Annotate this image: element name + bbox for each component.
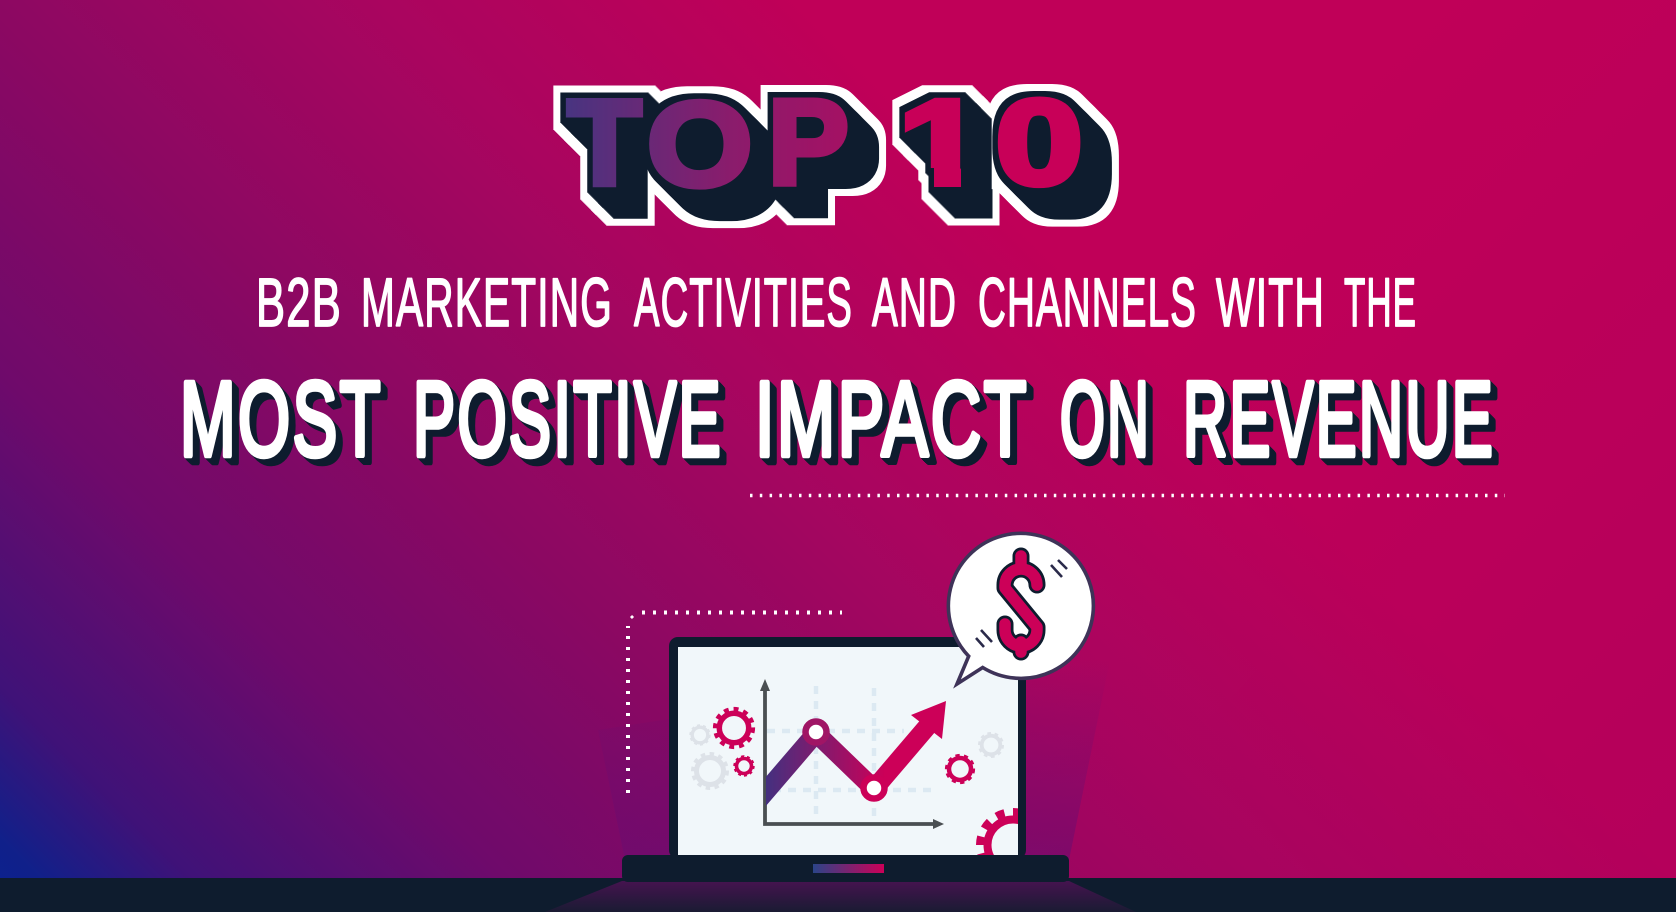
light beam behind laptop xyxy=(598,650,1112,860)
subtitle line 2 with extruded shadow: POSITIVE xyxy=(413,360,723,478)
floor reflection xyxy=(545,881,1136,912)
laptop colour bar xyxy=(813,864,884,873)
subtitle line 1 xyxy=(256,264,1417,341)
gear: grey large xyxy=(693,754,727,788)
subtitle line 1: THE xyxy=(1344,264,1417,341)
laptop base xyxy=(622,855,1069,882)
subtitle line 1: CHANNELS xyxy=(978,264,1197,341)
title: TOP 10 xyxy=(568,74,1083,212)
subtitle line 1: AND xyxy=(872,264,957,341)
gear: clipped corner red xyxy=(976,808,1018,855)
subtitle line 2 with extruded shadow xyxy=(180,360,1495,478)
subtitle line 1: ACTIVITIES xyxy=(634,264,853,341)
dotted divider line xyxy=(750,494,1505,497)
icon: dollar sign xyxy=(1005,556,1037,652)
laptop xyxy=(622,637,1069,882)
subtitle line 2 with extruded shadow: IMPACT xyxy=(755,360,1029,478)
gear: small red left xyxy=(735,757,753,775)
gear: grey right xyxy=(979,733,1003,757)
subtitle line 1: MARKETING xyxy=(361,264,613,341)
dark floor bar xyxy=(0,878,1676,912)
chart grid xyxy=(767,686,936,820)
dotted corner line xyxy=(628,612,842,793)
chart axes xyxy=(760,679,944,829)
rising trend line with arrow xyxy=(766,701,946,806)
gear: grey small xyxy=(690,725,710,745)
laptop lid xyxy=(669,637,1026,859)
title: TOP 10: T xyxy=(568,74,641,210)
subtitle line 2 with extruded shadow: ON xyxy=(1060,360,1151,478)
gear: large red xyxy=(715,709,753,747)
speech bubble with dollar sign xyxy=(948,533,1093,684)
chart point markers xyxy=(806,722,884,798)
title: TOP 10: P xyxy=(768,74,849,210)
subtitle line 1: WITH xyxy=(1216,264,1325,341)
sparkle ticks xyxy=(976,560,1067,647)
subtitle line 2 with extruded shadow: MOST xyxy=(180,360,383,478)
gears xyxy=(690,706,1018,855)
title: TOP 10: 10 xyxy=(898,74,1083,210)
gear: red right xyxy=(946,755,974,783)
laptop screen xyxy=(678,647,1018,855)
bubble xyxy=(948,533,1093,684)
title: TOP 10: O xyxy=(647,78,752,212)
subtitle line 1: B2B xyxy=(256,264,342,341)
